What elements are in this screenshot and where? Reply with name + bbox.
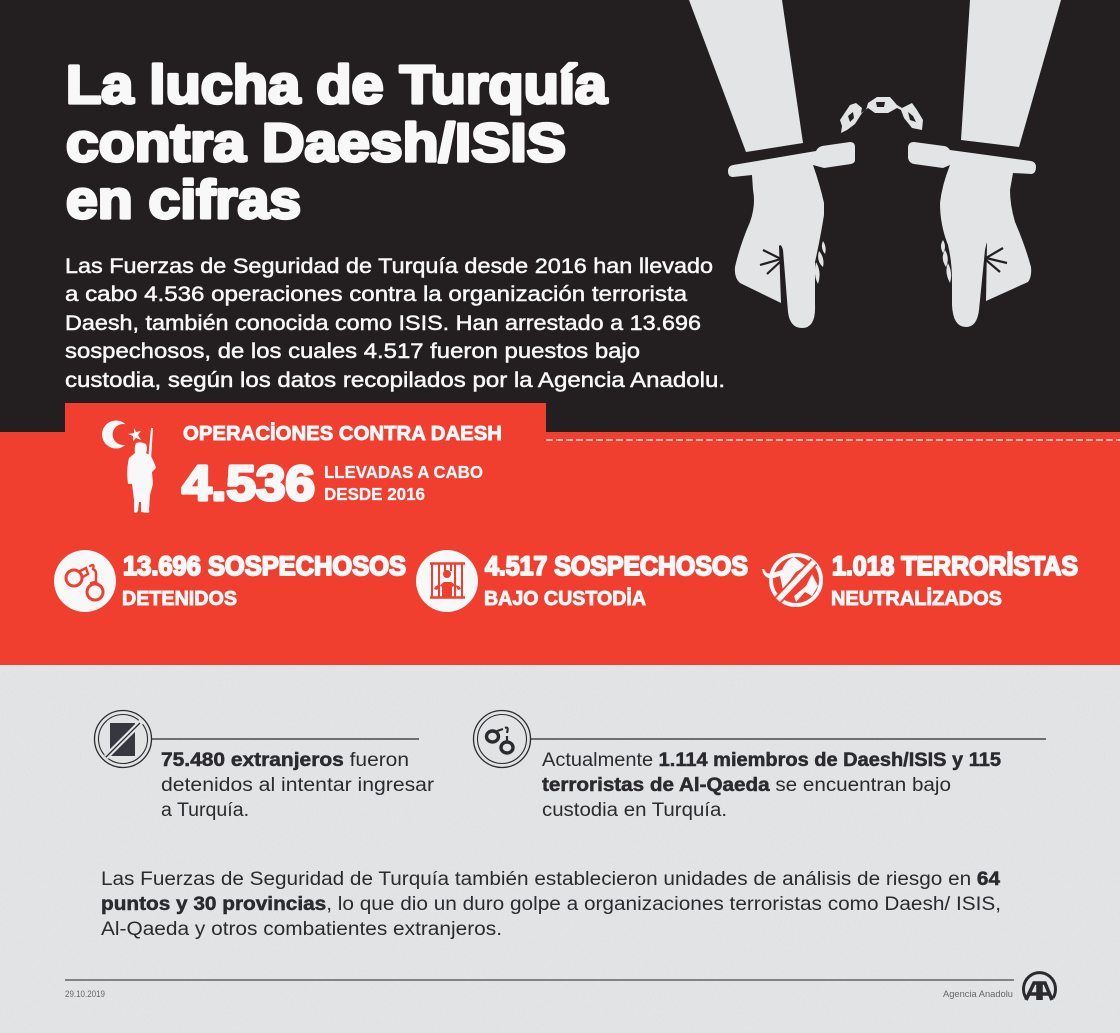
operations figure: 4.536 bbox=[182, 457, 315, 511]
intro text block: custodia, según los datos recopilados por la Agencia Anadolu. bbox=[65, 368, 725, 392]
note: members in custody bbox=[474, 710, 1046, 821]
intro text block bbox=[65, 254, 725, 392]
paragraph: risk analysis units: Al-Qaeda y otros combatientes extranjeros. bbox=[101, 919, 502, 940]
right cuff and hand bbox=[908, 142, 1036, 327]
footer credit: Agencia Anadolu bbox=[943, 989, 1013, 1000]
icon: handcuffs bbox=[54, 550, 116, 612]
intro text block: Daesh, también conocida como ISIS. Han arrestado a 13.696 bbox=[65, 311, 701, 335]
left forearm bbox=[689, 0, 803, 152]
stat: neutralised: 1.018 TERRORİSTAS bbox=[832, 551, 1078, 581]
panel: red statistics band bbox=[0, 403, 1120, 665]
note: members in custody: custodia en Turquía. bbox=[542, 800, 727, 821]
paragraph: risk analysis units: Las Fuerzas de Seguridad de Turquía también establecieron unidades de análisis de riesgo en 64 bbox=[101, 869, 1000, 890]
soldier bbox=[127, 442, 156, 513]
note: foreigners detained bbox=[94, 710, 435, 821]
stat: neutralised: NEUTRALİZADOS bbox=[831, 587, 1002, 610]
left cuff and hand bbox=[728, 142, 855, 328]
logo: Anadolu Agency bbox=[1024, 973, 1056, 1000]
illustration: handcuffed hands with broken chain bbox=[689, 0, 1061, 328]
panel: dark header background bbox=[0, 0, 1120, 432]
stat: detained: DETENIDOS bbox=[122, 588, 237, 610]
stat: neutralised bbox=[762, 551, 1078, 610]
footer date: 29.10.2019 bbox=[65, 989, 105, 999]
rifle bbox=[148, 428, 153, 460]
stat: detained bbox=[54, 550, 406, 612]
operations caption bbox=[324, 462, 483, 504]
stat: detained: 13.696 SOSPECHOSOS bbox=[123, 551, 406, 581]
note: members in custody: terroristas de Al-Qaeda se encuentran bajo bbox=[542, 775, 951, 796]
icon: handcuffs bbox=[474, 710, 530, 768]
title: contra Daesh/ISIS bbox=[66, 113, 566, 173]
stat: in custody: BAJO CUSTODİA bbox=[484, 587, 646, 610]
star bbox=[128, 428, 141, 441]
icon: finger creases bbox=[760, 248, 1007, 274]
right forearm bbox=[961, 0, 1061, 147]
operations heading: OPERACİONES CONTRA DAESH bbox=[183, 422, 502, 445]
title bbox=[66, 55, 608, 230]
title: La lucha de Turquía bbox=[66, 55, 608, 115]
icon: crescent, star and soldier bbox=[102, 421, 156, 513]
footer rule bbox=[65, 979, 1014, 981]
icon: crossed-out border document bbox=[94, 710, 152, 768]
paragraph: risk analysis units bbox=[101, 869, 1001, 940]
note: foreigners detained: 75.480 extranjeros fueron bbox=[161, 750, 409, 771]
icon: broken chain bbox=[840, 97, 923, 133]
stat: in custody bbox=[416, 550, 748, 612]
operations caption: DESDE 2016 bbox=[324, 484, 425, 504]
intro text block: a cabo 4.536 operaciones contra la organización terrorista bbox=[65, 282, 687, 306]
intro text block: sospechosos, de los cuales 4.517 fueron puestos bajo bbox=[65, 339, 640, 363]
finger tips bbox=[815, 241, 826, 284]
paragraph: risk analysis units: puntos y 30 provincias , lo que dio un duro golpe a organizaciones terroristas como Daesh/ ISIS, bbox=[101, 894, 1001, 915]
operations caption: LLEVADAS A CABO bbox=[324, 462, 483, 482]
note: members in custody: Actualmente 1.114 miembros de Daesh/ISIS y 115 bbox=[542, 750, 1001, 771]
note: foreigners detained: a Turquía. bbox=[161, 800, 249, 821]
title: en cifras bbox=[66, 170, 301, 230]
crescent bbox=[102, 421, 126, 449]
dashed divider bbox=[546, 439, 1120, 441]
icon: crossed-out scorpion bbox=[762, 555, 821, 605]
icon: prisoner behind bars bbox=[416, 550, 478, 612]
stat: in custody: 4.517 SOSPECHOSOS bbox=[485, 551, 748, 581]
panel: light grey lower background bbox=[0, 665, 1120, 1033]
note: foreigners detained: detenidos al intentar ingresar bbox=[161, 775, 435, 796]
intro text block: Las Fuerzas de Seguridad de Turquía desde 2016 han llevado bbox=[65, 254, 713, 278]
